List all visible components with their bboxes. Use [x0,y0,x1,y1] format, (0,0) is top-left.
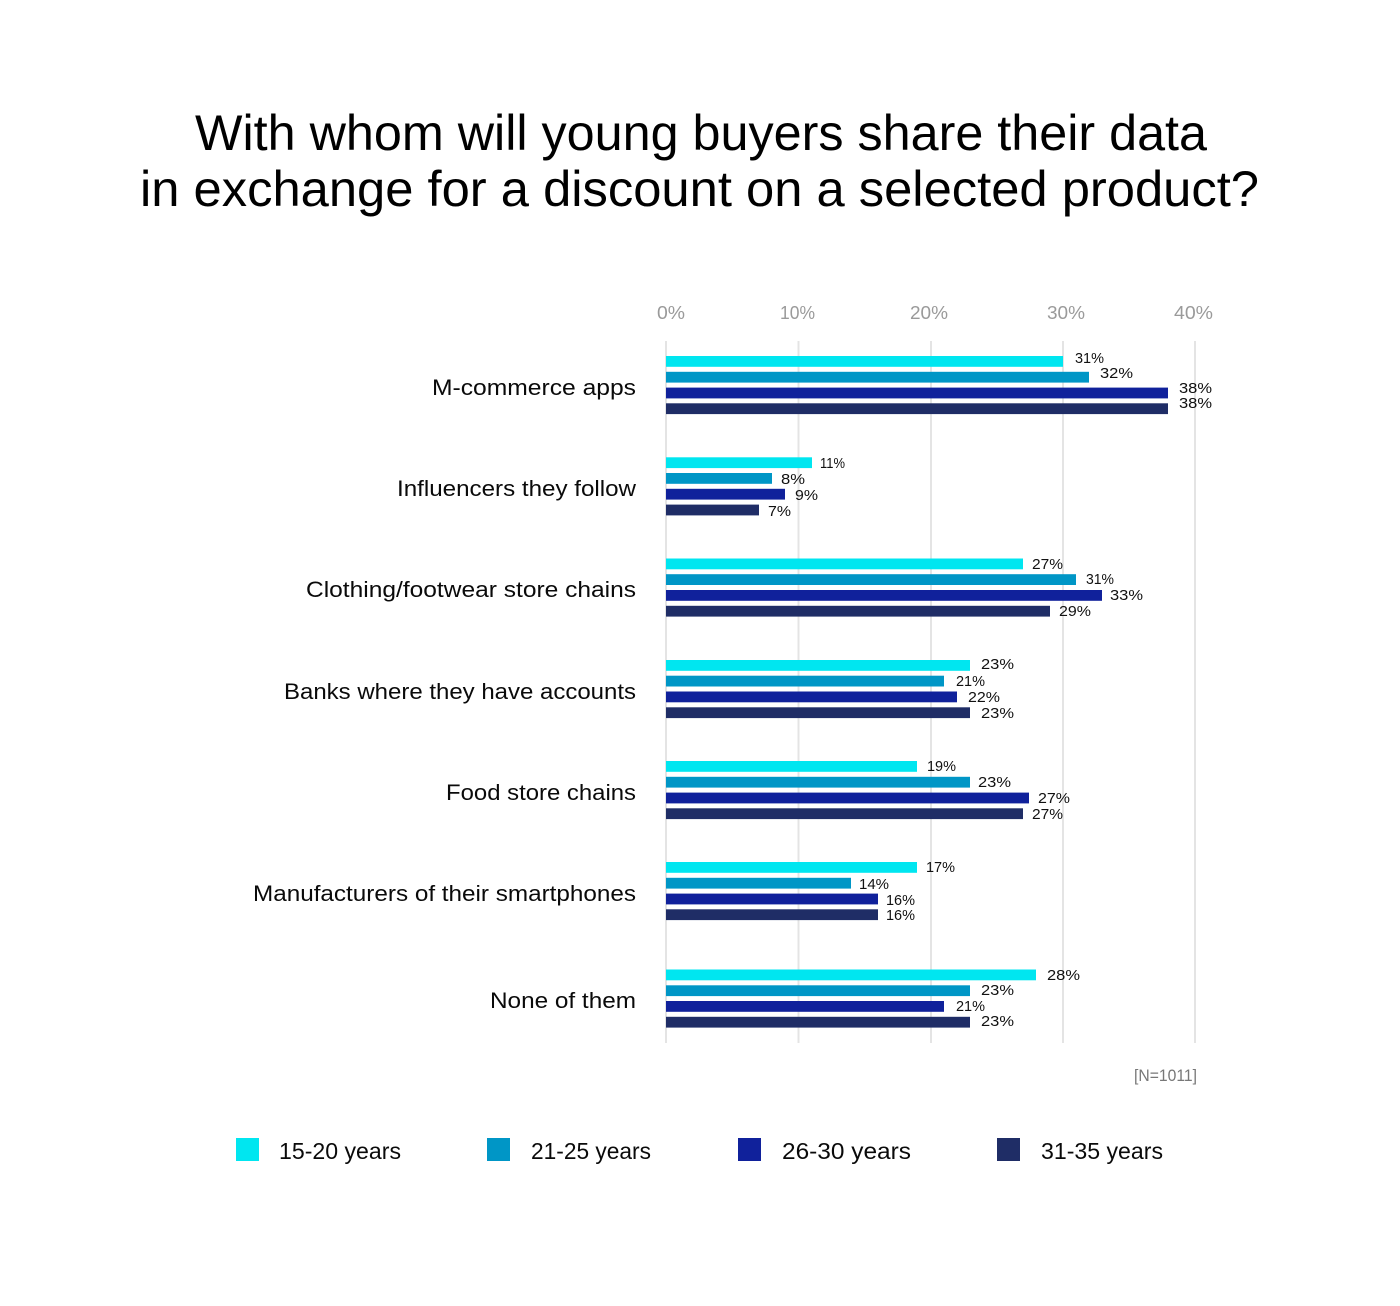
row: None of them [490,967,1080,1030]
row: M-commerce apps: 38% [1179,395,1212,412]
title: in exchange for a discount on a selected product? [140,161,1259,217]
legend item: 26-30 years: 26-30 years [782,1138,911,1164]
row: Manufacturers of their smartphones: Manufacturers of their smartphones [253,881,636,906]
row: Influencers they follow: 7% [768,503,791,520]
row: M-commerce apps: 38% [1179,380,1212,397]
row: Influencers they follow: 8% [781,471,805,488]
row: Influencers they follow [397,455,845,520]
row: Clothing/footwear store chains: Clothing/footwear store chains [306,577,636,602]
row: Banks where they have accounts: 23% [981,705,1014,722]
row: Influencers they follow: Influencers they follow [397,476,636,501]
row: Clothing/footwear store chains: 29% [1059,603,1091,620]
row: None of them: 23% [981,1013,1014,1030]
row: Food store chains [446,758,1070,823]
row: M-commerce apps: M-commerce apps [432,375,636,400]
row: Food store chains: Food store chains [446,780,636,805]
row: Manufacturers of their smartphones: 16% [886,892,915,909]
title [140,105,1259,217]
row: Influencers they follow: 11% [820,455,845,472]
x axis labels: 40% [1174,303,1213,323]
row: M-commerce apps: 32% [1100,365,1133,382]
row: Banks where they have accounts: 22% [968,689,1000,706]
sample size note: [N=1011] [1134,1066,1197,1085]
x axis labels: 0% [657,303,685,323]
row: Manufacturers of their smartphones: 17% [926,859,955,876]
legend [236,1138,1163,1164]
x axis labels: 20% [910,303,948,323]
row: Food store chains: 27% [1032,806,1063,823]
x axis labels: 10% [780,303,815,323]
row: Manufacturers of their smartphones: 14% [859,876,889,893]
bar chart [253,303,1213,1043]
row: None of them: 23% [981,982,1014,999]
x axis labels [657,303,1213,323]
row: None of them: 28% [1047,967,1080,984]
row: Banks where they have accounts: 21% [956,673,985,690]
row: M-commerce apps: 31% [1075,350,1104,367]
row: M-commerce apps [432,350,1212,414]
legend item: 15-20 years: 15-20 years [279,1138,401,1164]
row: Clothing/footwear store chains [306,556,1143,620]
row: Banks where they have accounts [284,656,1014,722]
row: Food store chains: 23% [978,774,1011,791]
x axis labels: 30% [1047,303,1085,323]
legend item: 21-25 years: 21-25 years [531,1138,651,1164]
row: Clothing/footwear store chains: 31% [1086,571,1114,588]
row: None of them: 21% [956,998,985,1015]
row: Clothing/footwear store chains: 27% [1032,556,1063,573]
row: Food store chains: 19% [927,758,956,775]
legend item: 31-35 years: 31-35 years [1041,1138,1163,1164]
title: With whom will young buyers share their data [195,105,1207,161]
row: Banks where they have accounts: 23% [981,656,1014,673]
row: Banks where they have accounts: Banks where they have accounts [284,679,636,704]
row: Manufacturers of their smartphones [253,859,955,924]
row: Influencers they follow: 9% [795,487,818,504]
row: Food store chains: 27% [1038,790,1070,807]
row: Manufacturers of their smartphones: 16% [886,907,915,924]
row: Clothing/footwear store chains: 33% [1110,587,1143,604]
row: None of them: None of them [490,988,636,1013]
